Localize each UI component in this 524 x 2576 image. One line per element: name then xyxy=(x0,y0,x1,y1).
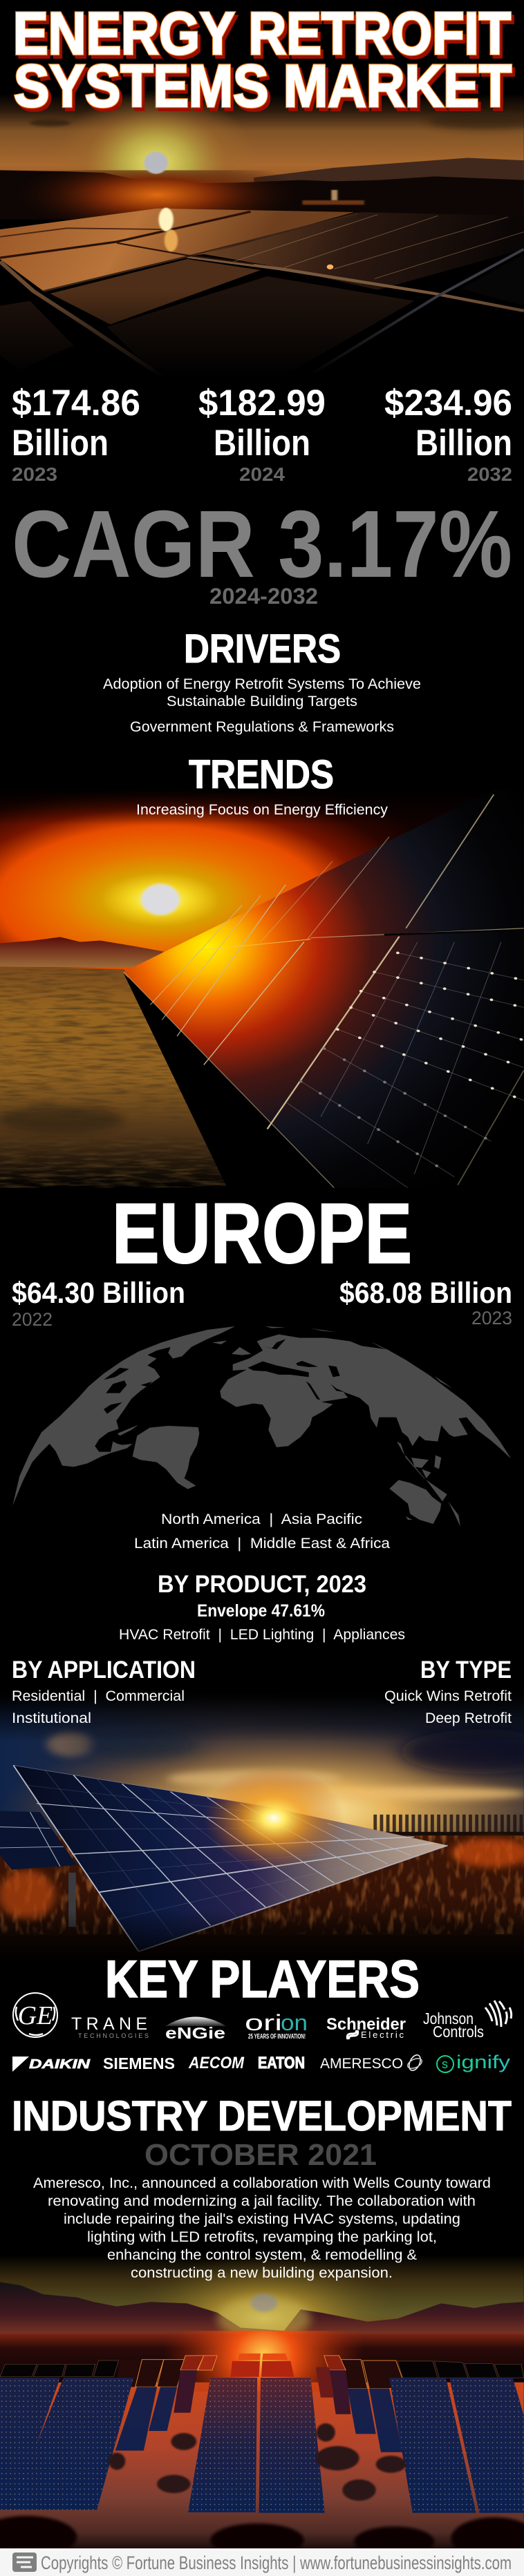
stat: 2032 market size: 2032 xyxy=(467,464,512,485)
logo: AECOM: AECOM xyxy=(188,2054,245,2072)
photo: desert solar farm at dusk xyxy=(0,2255,524,2560)
stat: Europe 2023: 2023 xyxy=(471,1308,512,1328)
logo: Daikin: DAIKIN xyxy=(29,2057,91,2071)
logo: Eaton: EATON xyxy=(258,2054,305,2072)
stat: Europe 2023: $68.08 Billion xyxy=(339,1277,512,1310)
footer bar xyxy=(0,2548,524,2576)
heading: trends: TRENDS xyxy=(189,752,334,797)
by application segment: BY APPLICATION xyxy=(12,1657,196,1683)
development paragraph xyxy=(33,2175,491,2281)
by type segment: BY TYPE xyxy=(420,1657,512,1683)
stat: 2024 market size: 2024 xyxy=(239,464,285,485)
stat: 2032 market size xyxy=(384,383,512,485)
logo: Ameresco: AMERESCO xyxy=(320,2056,403,2072)
development paragraph: include repairing the jail's existing HVAC systems, updating xyxy=(64,2211,460,2227)
heading: drivers: DRIVERS xyxy=(184,627,341,671)
stat: 2032 market size: $234.96 xyxy=(384,383,512,423)
trends text: Increasing Focus on Energy Efficiency xyxy=(136,802,389,818)
photo: rooftop solar panels at sunset xyxy=(0,86,524,388)
development paragraph: enhancing the control system, & remodelling & xyxy=(107,2247,417,2263)
stat: 2023 market size: $174.86 xyxy=(12,383,140,423)
date: October 2021: OCTOBER 2021 xyxy=(144,2138,377,2172)
logo: Siemens: SIEMENS xyxy=(103,2054,175,2072)
logo: Signify: s xyxy=(442,2057,448,2071)
photo: desert solar array with blazing sun xyxy=(0,789,524,1187)
stat: 2023 market size xyxy=(12,383,140,485)
logo: Engie xyxy=(165,2017,226,2042)
logo: GE: GE xyxy=(18,2001,53,2030)
logo: Engie: eNGie xyxy=(165,2024,225,2042)
world map globe xyxy=(12,1326,511,1527)
logo: Trane: TRANE xyxy=(71,2014,147,2034)
logo: Orion xyxy=(245,2010,308,2041)
drivers list xyxy=(103,676,421,735)
stat: 2023 market size: 2023 xyxy=(12,464,57,485)
development paragraph: constructing a new building expansion. xyxy=(131,2265,393,2281)
by application segment: Residential | Commercial xyxy=(12,1688,185,1704)
stat: 2024 market size xyxy=(198,383,326,485)
by application segment xyxy=(12,1657,196,1726)
by type segment xyxy=(384,1657,512,1726)
stat: 2024 market size: $182.99 xyxy=(198,383,326,423)
stat: 2024 market size: Billion xyxy=(214,423,310,464)
by type segment: Quick Wins Retrofit xyxy=(384,1688,512,1704)
stat: Europe 2022 xyxy=(12,1277,185,1330)
logo: Schneider Electric: Schneider xyxy=(326,2015,406,2034)
stat: Europe 2022: 2022 xyxy=(12,1309,53,1330)
drivers list: Sustainable Building Targets xyxy=(167,694,357,709)
development paragraph: Ameresco, Inc., announced a collaboration with Wells County toward xyxy=(33,2175,491,2191)
logo: Orion: ori xyxy=(245,2010,282,2035)
logo: Johnson Controls xyxy=(423,2001,512,2041)
logo: Signify xyxy=(437,2052,511,2072)
logo: Schneider Electric: Electric xyxy=(361,2030,404,2040)
development paragraph: renovating and modernizing a jail facility. The collaboration with xyxy=(48,2193,476,2209)
logo: Johnson Controls: Controls xyxy=(433,2023,484,2041)
CAGR callout: 2024-2032 xyxy=(209,584,318,609)
title xyxy=(13,1,514,123)
by application segment: Institutional xyxy=(12,1710,91,1726)
stat: Europe 2022: $64.30 Billion xyxy=(12,1277,185,1310)
by product segment: Envelope 47.61% xyxy=(197,1601,325,1621)
by product segment: BY PRODUCT, 2023 xyxy=(158,1571,366,1598)
logo: GE xyxy=(13,1993,57,2037)
logo: Orion: on xyxy=(281,2010,308,2035)
logo: Orion: 25 YEARS OF INNOVATION! xyxy=(248,2033,306,2041)
regions list xyxy=(134,1511,390,1552)
regions list: North America | Asia Pacific xyxy=(161,1511,362,1527)
heading: key players: KEY PLAYERS xyxy=(105,1950,420,2009)
development paragraph: lighting with LED retrofits, revamping the parking lot, xyxy=(87,2229,437,2245)
drivers list: Adoption of Energy Retrofit Systems To Achieve xyxy=(103,676,421,692)
logo: Trane: TECHNOLOGIES xyxy=(78,2032,149,2039)
logo: Signify: ignify xyxy=(456,2052,511,2072)
stat: 2023 market size: Billion xyxy=(12,423,109,464)
by product segment xyxy=(119,1571,405,1643)
logo: Johnson Controls: Johnson xyxy=(423,2010,474,2028)
logo: Ameresco xyxy=(320,2053,424,2072)
by product segment: HVAC Retrofit | LED Lighting | Appliances xyxy=(119,1627,405,1643)
drivers list: Government Regulations & Frameworks xyxy=(130,719,394,735)
photo: solar array in field at sunset xyxy=(0,1695,524,1981)
regions list: Latin America | Middle East & Africa xyxy=(134,1536,390,1552)
stat: Europe 2023 xyxy=(339,1277,512,1328)
by type segment: Deep Retrofit xyxy=(425,1710,512,1726)
heading: Europe: EUROPE xyxy=(112,1187,412,1281)
logo: Daikin xyxy=(12,2057,91,2072)
